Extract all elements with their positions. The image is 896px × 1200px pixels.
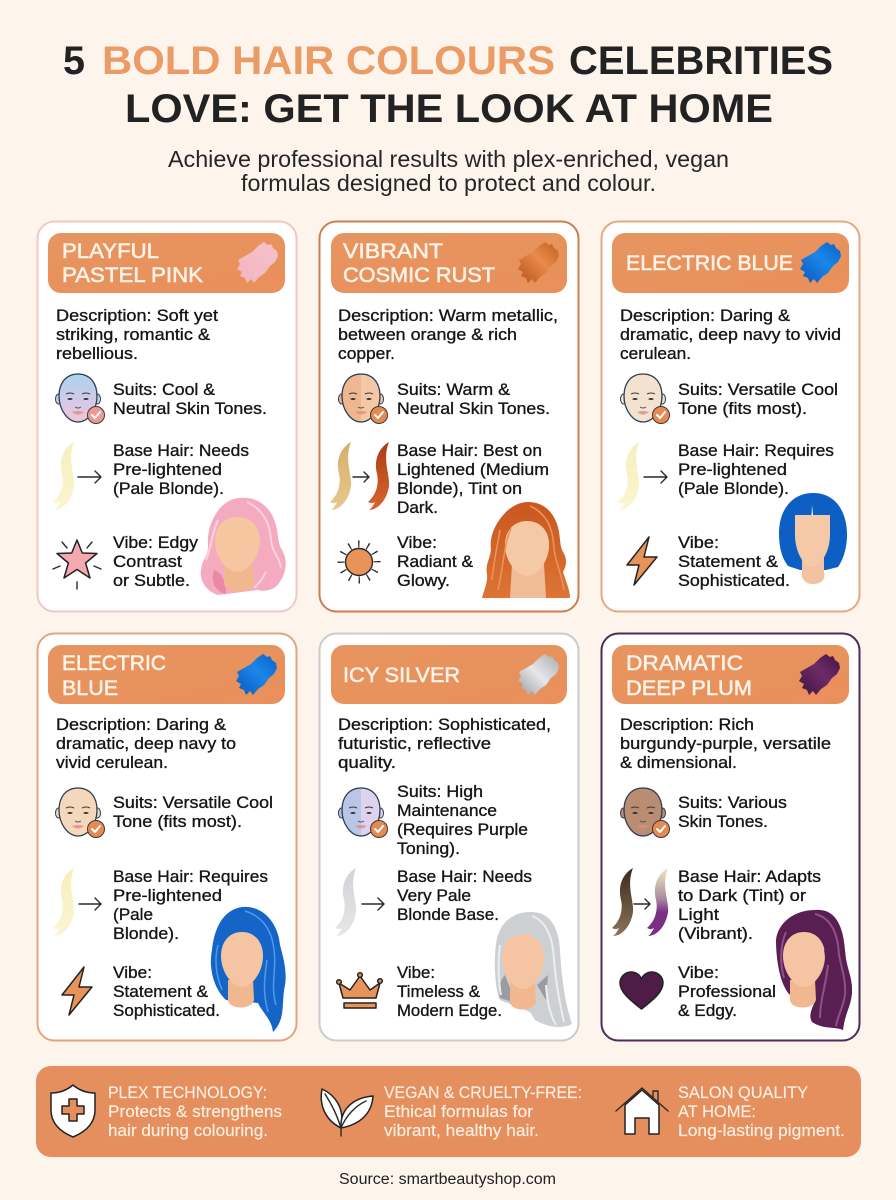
description text: Description: Sophisticated,	[338, 715, 551, 734]
suits text	[678, 380, 838, 418]
icon: leaves	[321, 1089, 373, 1136]
suits text	[397, 380, 550, 418]
suits text: Suits: Warm &	[397, 380, 511, 399]
description text	[56, 306, 218, 363]
icon: silver strand with arrow	[335, 868, 384, 936]
suits text: Tone (fits most).	[113, 812, 242, 831]
heading: electric blue: ELECTRIC	[62, 652, 166, 675]
swatch: blue brush stroke	[236, 654, 277, 695]
vibe text: Vibe:	[113, 963, 152, 982]
icon: star	[53, 540, 101, 589]
suits text	[397, 782, 528, 858]
suits text	[113, 380, 267, 418]
description text: striking, romantic &	[56, 325, 211, 344]
description text: burgundy-purple, versatile	[620, 734, 831, 753]
swatch: pink brush stroke	[237, 242, 278, 283]
swatch: silver brush stroke	[518, 654, 559, 695]
suits text	[113, 793, 273, 831]
heading: electric blue	[48, 645, 285, 704]
heading: playful pastel pink: PASTEL PINK	[62, 264, 203, 287]
vibe text: Vibe:	[678, 963, 719, 982]
icon: shield with cross	[51, 1085, 95, 1137]
heading: vibrant cosmic rust: VIBRANT	[343, 240, 443, 263]
base hair text: (Vibrant).	[678, 924, 753, 943]
vegan and cruelty-free text: Ethical formulas for	[384, 1103, 534, 1121]
description text: Description: Rich	[620, 715, 754, 734]
vibe text: Radiant &	[397, 552, 474, 571]
base hair text: Blonde).	[113, 924, 179, 943]
vibe text	[113, 533, 199, 590]
vibe text: Vibe: Edgy	[113, 533, 199, 552]
base hair text: Base Hair: Best on	[397, 441, 542, 460]
vibe text	[397, 963, 502, 1020]
description text: & dimensional.	[620, 753, 737, 772]
description text: Description: Daring &	[620, 306, 791, 325]
subtitle: formulas designed to protect and colour.	[241, 170, 656, 196]
description text: between orange & rich	[338, 325, 517, 344]
vibe text	[678, 533, 790, 590]
base hair text: to Dark (Tint) or	[678, 886, 806, 905]
description text: vivid cerulean.	[56, 753, 168, 772]
icon: dark to plum strands	[612, 868, 668, 936]
icon: blonde to copper strands	[330, 442, 389, 510]
icon: cool skin tone face	[56, 374, 104, 424]
heading: playful pastel pink	[48, 233, 285, 293]
base hair text: Base Hair: Needs	[113, 441, 249, 460]
salon quality text: AT HOME:	[678, 1103, 756, 1121]
title: CELEBRITIES	[569, 39, 833, 83]
description text: dramatic, deep navy to vivid	[620, 325, 841, 344]
salon quality text: Long-lasting pigment.	[678, 1122, 845, 1140]
suits text: Suits: Versatile Cool	[113, 793, 273, 812]
panel: electric blue waves	[38, 634, 296, 1040]
heading: dramatic deep plum: DEEP PLUM	[626, 677, 752, 700]
icon: warm skin tone face	[338, 374, 388, 424]
base hair text: (Pale Blonde).	[678, 479, 789, 498]
salon quality text: SALON QUALITY	[678, 1084, 808, 1102]
plex technology text: Protects & strengthens	[108, 1103, 282, 1121]
base hair text: (Pale	[113, 905, 153, 924]
suits text: Suits: Cool &	[113, 380, 216, 399]
heading: electric blue: ELECTRIC BLUE	[626, 252, 793, 275]
heading: playful pastel pink: PLAYFUL	[62, 240, 159, 263]
icon: lightning bolt	[62, 967, 92, 1015]
vibe text: Professional	[678, 982, 776, 1001]
description text: futuristic, reflective	[338, 734, 491, 753]
vibe text: Timeless &	[397, 982, 481, 1001]
title: BOLD HAIR COLOURS	[102, 39, 555, 83]
base hair text: Light	[678, 905, 719, 924]
illustration: blue long wavy hair	[211, 907, 286, 1032]
base hair text	[678, 441, 834, 498]
suits text: (Requires Purple	[397, 820, 528, 839]
suits text: Neutral Skin Tones.	[113, 399, 267, 418]
base hair text: Base Hair: Requires	[113, 867, 268, 886]
vegan and cruelty-free text	[384, 1084, 582, 1140]
panel: electric blue bob	[602, 222, 860, 612]
base hair text: Lightened (Medium	[397, 460, 549, 479]
base hair text: Pre-lightened	[113, 460, 222, 479]
illustration: rust long wavy hair	[482, 502, 570, 598]
plex technology text: PLEX TECHNOLOGY:	[108, 1084, 267, 1102]
panel: benefits footer band	[36, 1066, 861, 1157]
heading: vibrant cosmic rust: COSMIC RUST	[343, 264, 495, 287]
vibe text	[678, 963, 776, 1020]
swatch: rust brush stroke	[518, 242, 559, 283]
panel: icy silver	[320, 634, 578, 1040]
icon: light skin tone face	[56, 788, 104, 838]
plex technology text	[108, 1084, 282, 1140]
panel: vibrant cosmic rust	[320, 222, 578, 612]
swatch: plum brush stroke	[799, 654, 840, 695]
vibe text: Sophisticated.	[678, 571, 790, 590]
illustration: pink wavy hair	[201, 498, 286, 595]
vibe text: Contrast	[113, 552, 182, 571]
suits text	[678, 793, 787, 831]
base hair text: Pre-lightened	[113, 886, 222, 905]
heading: dramatic deep plum	[612, 645, 849, 704]
icon: heart	[620, 972, 663, 1009]
base hair text: Dark.	[397, 498, 438, 517]
base hair text: Base Hair: Requires	[678, 441, 834, 460]
suits text: Suits: Various	[678, 793, 787, 812]
title: 5	[63, 39, 85, 83]
vibe text: Glowy.	[397, 571, 450, 590]
illustration: silver straight hair	[495, 912, 572, 1027]
title	[63, 39, 833, 131]
title: LOVE: GET THE LOOK AT HOME	[125, 87, 773, 131]
heading: icy silver	[331, 645, 567, 704]
description text: Description: Soft yet	[56, 306, 218, 325]
vibe text: Modern Edge.	[397, 1001, 502, 1020]
vibe text: & Edgy.	[678, 1001, 737, 1020]
base hair text	[113, 441, 249, 498]
vegan and cruelty-free text: vibrant, healthy hair.	[384, 1122, 539, 1140]
icon: cool toned face	[338, 788, 388, 838]
heading: vibrant cosmic rust	[331, 233, 567, 293]
base hair text: Base Hair: Needs	[397, 867, 532, 886]
illustration: plum wavy hair	[776, 910, 852, 1030]
description text	[620, 306, 841, 363]
base hair text	[678, 867, 821, 943]
source line: Source: smartbeautyshop.com	[339, 1171, 556, 1188]
suits text: Suits: Versatile Cool	[678, 380, 838, 399]
icon: house	[616, 1088, 668, 1134]
suits text: Neutral Skin Tones.	[397, 399, 550, 418]
icon: pale blonde strand with arrow	[618, 442, 667, 510]
icon: lightning bolt	[627, 537, 657, 585]
description text	[620, 715, 831, 772]
vibe text: or Subtle.	[113, 571, 190, 590]
description text: Description: Daring &	[56, 715, 227, 734]
suits text: Maintenance	[397, 801, 497, 820]
vibe text	[397, 533, 474, 590]
heading: dramatic deep plum: DRAMATIC	[626, 652, 743, 675]
icon: deep skin tone face	[620, 788, 670, 838]
panel: dramatic deep plum	[602, 634, 860, 1040]
base hair text: Pre-lightened	[678, 460, 787, 479]
vibe text: Vibe:	[397, 963, 435, 982]
vibe text: Vibe:	[397, 533, 437, 552]
suits text: Toning).	[397, 839, 460, 858]
heading: electric blue	[612, 233, 849, 293]
description text	[56, 715, 236, 772]
illustration: blue bob with bangs	[779, 493, 847, 584]
base hair text: (Pale Blonde).	[113, 479, 224, 498]
description text: quality.	[338, 753, 396, 772]
base hair text: Very Pale	[397, 886, 471, 905]
icon: sun	[340, 543, 378, 581]
description text: Description: Warm metallic,	[338, 306, 558, 325]
vibe text: Vibe:	[678, 533, 719, 552]
suits text: Tone (fits most).	[678, 399, 807, 418]
salon quality text	[678, 1084, 845, 1140]
plex technology text: hair during colouring.	[108, 1122, 268, 1140]
icon: crown	[337, 973, 382, 1008]
vibe text: Sophisticated.	[113, 1001, 220, 1020]
heading: icy silver: ICY SILVER	[343, 664, 460, 687]
vibe text	[113, 963, 220, 1020]
base hair text: Blonde Base.	[397, 905, 499, 924]
icon: neutral skin tone face	[620, 374, 670, 424]
description text: cerulean.	[620, 344, 691, 363]
icon: pale blonde strand with arrow	[53, 868, 101, 936]
description text: dramatic, deep navy to	[56, 734, 236, 753]
vegan and cruelty-free text: VEGAN & CRUELTY-FREE:	[384, 1084, 582, 1102]
suits text: Suits: High	[397, 782, 483, 801]
vibe text: Statement &	[678, 552, 779, 571]
base hair text	[397, 441, 549, 517]
base hair text: Base Hair: Adapts	[678, 867, 821, 886]
icon: pale blonde strand with arrow	[53, 442, 101, 510]
subtitle: Achieve professional results with plex-enriched, vegan	[168, 146, 729, 172]
swatch: blue brush stroke	[800, 242, 841, 283]
vibe text: Statement &	[113, 982, 209, 1001]
description text: copper.	[338, 344, 395, 363]
base hair text: Blonde), Tint on	[397, 479, 522, 498]
subtitle	[168, 146, 729, 196]
panel: playful pastel pink	[38, 222, 296, 612]
base hair text	[397, 867, 532, 924]
description text	[338, 715, 551, 772]
description text: rebellious.	[56, 344, 138, 363]
suits text: Skin Tones.	[678, 812, 768, 831]
heading: electric blue: BLUE	[62, 677, 118, 700]
description text	[338, 306, 558, 363]
base hair text	[113, 867, 268, 943]
